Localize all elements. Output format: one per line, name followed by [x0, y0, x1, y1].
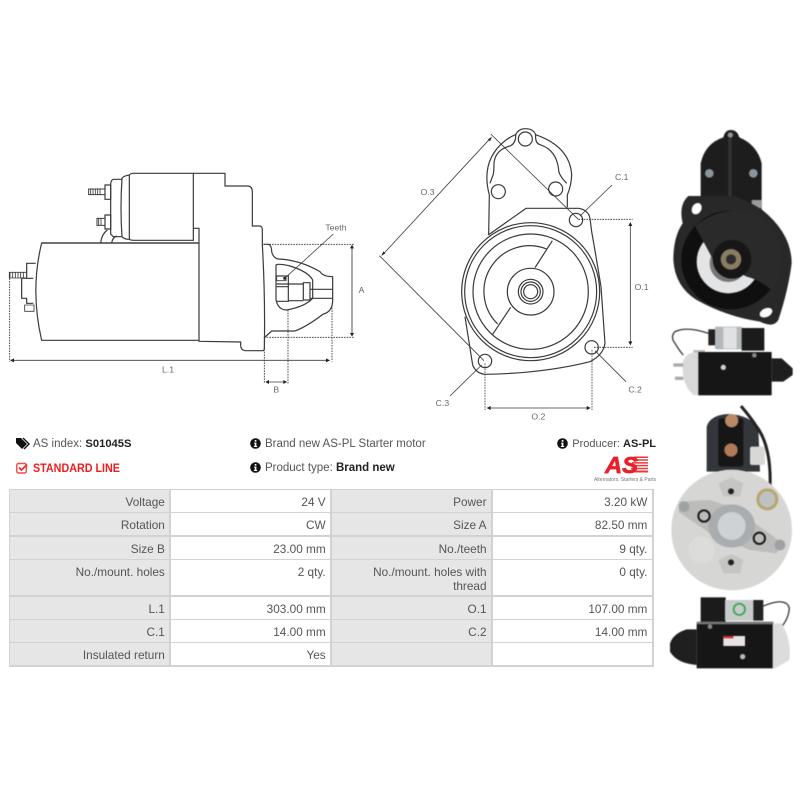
dimension O.3: O.3 [421, 187, 435, 197]
brand new line [250, 438, 426, 450]
pinion housing outline [263, 244, 333, 338]
dimension O.2 [485, 350, 592, 421]
callout C.2: C.2 [628, 385, 642, 395]
specification table: Insulated return [83, 648, 165, 662]
dimension O.3 [379, 134, 578, 361]
specification table: 14.00 mm [273, 625, 326, 639]
specification table: O.1 [468, 602, 487, 616]
specification table: Size A [453, 518, 487, 532]
specification table: Size B [131, 542, 165, 556]
callout C.1 [580, 172, 629, 216]
motor body outline [9, 243, 199, 340]
icon: tags [16, 438, 30, 450]
dimension B: B [273, 385, 279, 395]
specification table: 107.00 mm [588, 602, 647, 616]
specification table [8, 489, 654, 667]
specification table: thread [453, 579, 487, 593]
specification table: C.1 [146, 625, 165, 639]
producer text: Producer: AS-PL [572, 438, 656, 450]
AS index text: AS index: S01045S [33, 438, 131, 450]
teeth leader line and label [283, 223, 347, 280]
rear housing outline [487, 129, 572, 235]
specification table: 23.00 mm [273, 542, 326, 556]
specification table: C.2 [468, 625, 487, 639]
product type line [250, 462, 395, 474]
icon: check box [16, 462, 28, 474]
callout C.3: C.3 [436, 398, 449, 408]
dimension A [267, 244, 365, 337]
dimension L.1: L.1 [162, 364, 174, 374]
specification table: CW [306, 518, 326, 532]
AS index line [16, 438, 131, 450]
logo stripes [630, 456, 648, 472]
specification table: 82.50 mm [595, 518, 647, 532]
dimension B [264, 310, 288, 395]
specification table: 14.00 mm [595, 625, 647, 639]
callout C.3 [436, 365, 482, 408]
icon: info [557, 438, 568, 449]
concentric bore circles [462, 223, 600, 361]
producer line [557, 438, 656, 450]
dimension A: A [359, 285, 365, 295]
dimension O.2: O.2 [531, 411, 545, 421]
specification table: 9 qty. [619, 542, 647, 556]
standard line badge [16, 461, 120, 475]
dimension O.1: O.1 [635, 282, 649, 292]
mounting flange outline [465, 208, 605, 374]
specification table: 24 V [301, 495, 326, 509]
specification table: Power [453, 495, 487, 509]
specification table: Rotation [121, 518, 165, 532]
specification table: Yes [306, 648, 326, 662]
specification table: 3.20 kW [604, 495, 647, 509]
icon: info [250, 438, 261, 449]
specification table: 0 qty. [619, 565, 647, 579]
product type text: Product type: Brand new [265, 462, 395, 474]
icon: info [250, 462, 261, 473]
solenoid outline [89, 173, 265, 351]
teeth leader line and label: Teeth [325, 223, 347, 233]
logo letters: AS [604, 452, 639, 478]
dimension L.1 [10, 278, 332, 374]
specification table: No./teeth [439, 542, 487, 556]
specification table: Voltage [125, 495, 165, 509]
specification table: L.1 [148, 602, 165, 616]
standard line text: STANDARD LINE [33, 461, 120, 475]
specification table: No./mount. holes with [373, 565, 487, 579]
specification table: No./mount. holes [76, 565, 165, 579]
callout C.1: C.1 [615, 172, 629, 182]
logo tagline: Alternators, Starters & Parts [594, 477, 656, 483]
specification table: 2 qty. [298, 565, 326, 579]
callout C.2 [595, 351, 642, 395]
mounting holes [478, 213, 598, 368]
brand new text: Brand new AS-PL Starter motor [265, 438, 426, 450]
dimension O.1 [578, 219, 649, 347]
specification table: 303.00 mm [267, 602, 326, 616]
